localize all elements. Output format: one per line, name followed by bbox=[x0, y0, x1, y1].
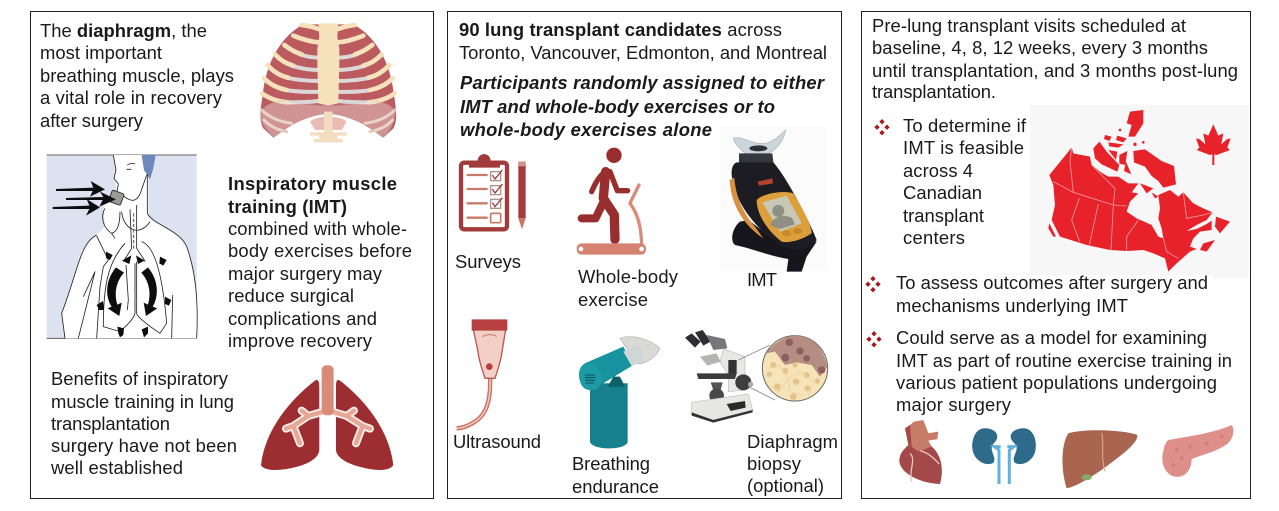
bullet list: aims bbox=[865, 115, 1232, 415]
icon: rib cage with diaphragm bbox=[260, 23, 396, 142]
bullet: feasibility: transplant bbox=[903, 205, 984, 226]
bullet: model: major surgery bbox=[896, 394, 1012, 415]
text: visit schedule: transplantation. bbox=[872, 81, 996, 102]
text: visit schedule: Pre-lung transplant visits scheduled at bbox=[872, 15, 1186, 36]
icon: breathing endurance device bbox=[575, 337, 660, 448]
text: diaphragm intro: most important bbox=[40, 42, 162, 63]
label: IMT: IMT bbox=[747, 269, 777, 290]
label: surveys: Surveys bbox=[455, 251, 521, 272]
text: candidates: 90 lung transplant candidates across bbox=[459, 19, 782, 40]
text: candidates: Toronto, Vancouver, Edmonton, and Montreal bbox=[459, 42, 827, 63]
icon: heart bbox=[899, 420, 942, 484]
icon: liver bbox=[1062, 430, 1137, 488]
bullet: outcomes bbox=[865, 272, 1208, 316]
label: breathing endurance: Breathing bbox=[572, 453, 650, 474]
bullet: model: IMT as part of routine exercise training in bbox=[896, 350, 1232, 371]
text: diaphragm intro: The diaphragm, the bbox=[40, 20, 207, 41]
text: visit schedule bbox=[872, 15, 1238, 102]
text: inspiratory muscle training: body exercises before bbox=[228, 240, 412, 261]
text: randomization: Participants randomly assigned to either bbox=[460, 72, 825, 93]
bullet: feasibility: Canadian bbox=[903, 182, 982, 203]
icon: treadmill runner bbox=[577, 148, 646, 255]
text: inspiratory muscle training: reduce surgical bbox=[228, 285, 354, 306]
text: benefits not established: transplantation bbox=[51, 413, 170, 434]
bullet: model: Could serve as a model for examining bbox=[896, 327, 1207, 348]
text: inspiratory muscle training: combined with whole- bbox=[228, 218, 407, 239]
icon: kidneys bbox=[972, 428, 1036, 484]
text: benefits not established: well established bbox=[50, 457, 183, 478]
label: breathing endurance: endurance bbox=[572, 476, 659, 497]
label: whole-body exercise: Whole-body bbox=[578, 266, 679, 287]
label: diaphragm biopsy bbox=[747, 431, 838, 496]
text: candidates bbox=[459, 19, 827, 63]
bullet: outcomes: mechanisms underlying IMT bbox=[896, 295, 1128, 316]
icon: lungs bbox=[261, 365, 393, 470]
text: benefits not established: muscle training in lung bbox=[51, 391, 234, 412]
text: inspiratory muscle training bbox=[228, 173, 412, 351]
bullet: model bbox=[866, 327, 1232, 415]
map: Canada with maple leaf bbox=[1020, 105, 1248, 282]
text: randomization: IMT and whole-body exercises or to bbox=[460, 96, 775, 117]
panel: background and diaphragm bbox=[30, 12, 434, 498]
text: diaphragm intro: breathing muscle, plays bbox=[40, 65, 234, 86]
bullet: model: various patient populations undergoing bbox=[896, 372, 1217, 393]
bullet: feasibility bbox=[874, 115, 1027, 248]
label: ultrasound: Ultrasound bbox=[453, 431, 541, 452]
bullet: outcomes: To assess outcomes after surgery and bbox=[896, 272, 1208, 293]
icon: ultrasound probe bbox=[457, 319, 507, 428]
panel: study design bbox=[448, 12, 842, 498]
icon: pancreas bbox=[1162, 425, 1233, 477]
icon: surveys clipboard bbox=[461, 154, 526, 229]
text: benefits not established bbox=[50, 368, 237, 478]
label: whole-body exercise: exercise bbox=[578, 289, 648, 310]
text: inspiratory muscle training: training (IMT) bbox=[228, 196, 347, 217]
text: visit schedule: until transplantation, and 3 months post-lung bbox=[872, 60, 1238, 81]
text: benefits not established: surgery have not been bbox=[51, 435, 237, 456]
bullet: feasibility: IMT is feasible bbox=[903, 137, 1024, 158]
text: inspiratory muscle training: major surgery may bbox=[228, 263, 383, 284]
text: inspiratory muscle training: improve recovery bbox=[228, 330, 373, 351]
text: diaphragm intro bbox=[40, 20, 234, 131]
text: benefits not established: Benefits of inspiratory bbox=[51, 368, 229, 389]
label: breathing endurance bbox=[572, 453, 659, 497]
label: diaphragm biopsy: (optional) bbox=[747, 475, 824, 496]
label: diaphragm biopsy: biopsy bbox=[747, 453, 802, 474]
text: randomization: whole-body exercises alone bbox=[460, 119, 712, 140]
icon: microscope and tissue bbox=[685, 330, 828, 423]
text: visit schedule: baseline, 4, 8, 12 weeks, every 3 months bbox=[872, 37, 1208, 58]
panel: aims and follow-up bbox=[862, 12, 1250, 498]
bullet: feasibility: across 4 bbox=[903, 160, 973, 181]
text: inspiratory muscle training: complications and bbox=[228, 308, 377, 329]
bullet: feasibility: To determine if bbox=[903, 115, 1027, 136]
text: inspiratory muscle training: Inspiratory muscle bbox=[228, 173, 397, 194]
text: diaphragm intro: a vital role in recovery bbox=[40, 87, 223, 108]
text: diaphragm intro: after surgery bbox=[40, 110, 144, 131]
label: diaphragm biopsy: Diaphragm bbox=[747, 431, 838, 452]
bullet: feasibility: centers bbox=[903, 227, 965, 248]
label: whole-body exercise bbox=[578, 266, 679, 310]
illustration: person breathing through IMT device bbox=[47, 155, 197, 338]
icon: IMT device bbox=[720, 127, 827, 272]
text: randomization bbox=[460, 72, 825, 140]
